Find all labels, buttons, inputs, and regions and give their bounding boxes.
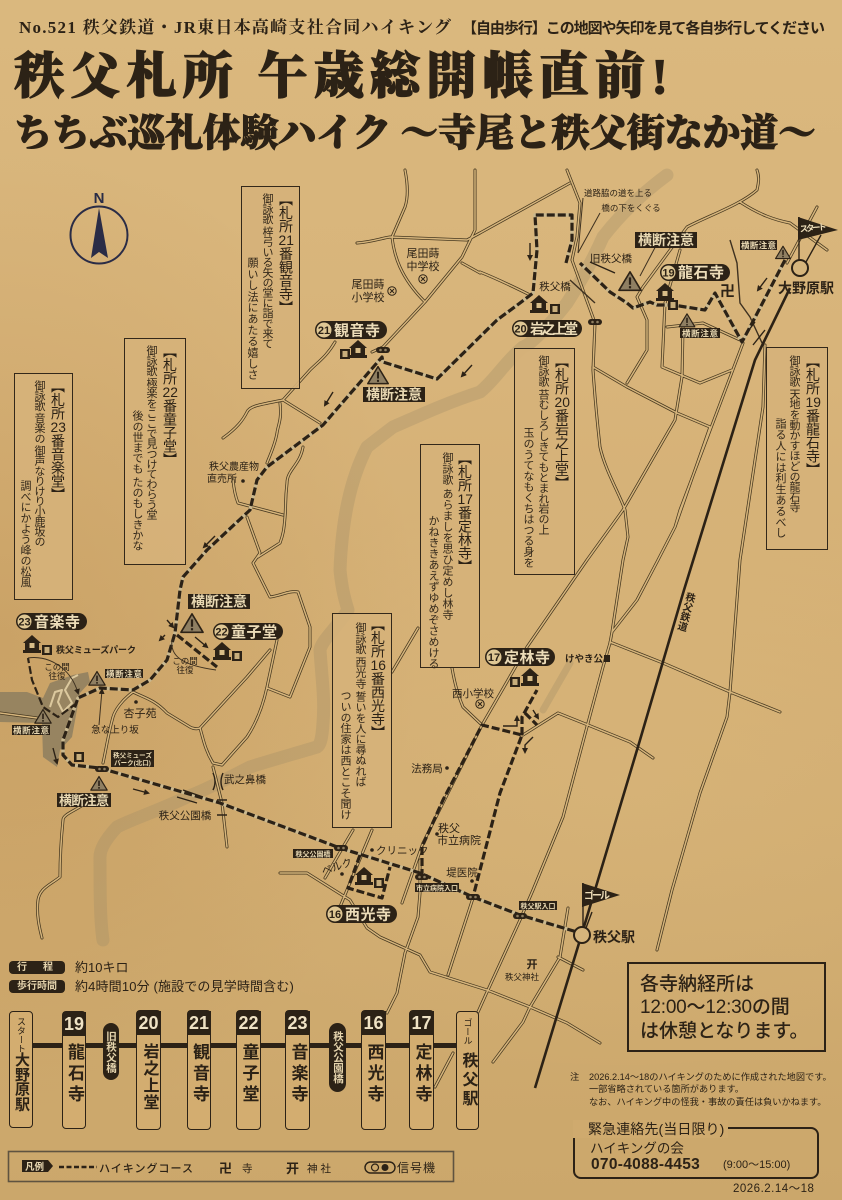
temple 21 marker — [315, 321, 387, 359]
roads — [0, 170, 827, 1087]
legend: hiking course: ハイキングコース — [99, 1161, 193, 1175]
number 22: 22 — [238, 1012, 259, 1032]
map place names: 尾田蒔 — [406, 247, 440, 260]
map place names: 堤医院 — [446, 867, 478, 879]
verse: temple 20 second line: 玉のうてなもくちはつる身を — [522, 427, 534, 567]
contact heading: 緊急連絡先(当日限り) — [588, 1121, 724, 1137]
heading: temple 22: 【札所 22 番童子堂】 — [162, 344, 178, 466]
map place names: 中学校 — [406, 259, 440, 273]
map place names: 武之鼻橋 — [224, 773, 266, 786]
warning triangles — [35, 246, 790, 790]
icon: temple symbol: 卍 — [720, 283, 735, 300]
bridge pill: 旧秩父橋 — [103, 1023, 119, 1080]
map place names: ベルク — [320, 857, 354, 878]
legend frame — [8, 1152, 454, 1182]
temple 19 marker — [656, 264, 730, 310]
map place names: 秩父公園橋 — [159, 809, 212, 822]
number 20: 20 — [138, 1012, 159, 1032]
legend: hiking course — [59, 1161, 193, 1175]
route stop: 23 — [285, 1010, 310, 1130]
verse: temple 22 first line: 御詠歌 極楽をここで見つけてわらう堂 — [145, 345, 157, 519]
temple 19 marker: 龍石寺 — [678, 264, 724, 282]
name 龍石寺: 龍石寺 — [65, 1043, 84, 1106]
start flag: スタート — [799, 222, 827, 234]
map place names: 秩父 — [438, 822, 460, 835]
note line 1: 2026.2.14〜18のハイキングのために作成された地図です。 — [589, 1072, 832, 1082]
dark map labels: 秩父公園橋 — [296, 850, 330, 858]
temple 22 marker: 童子堂 — [231, 624, 277, 641]
distance tag: 行程 — [17, 962, 69, 973]
extra fuda mark — [74, 752, 84, 762]
goal station — [574, 927, 635, 945]
temple 21 marker: 観音寺 — [334, 322, 380, 340]
verse panel: temple 20 — [514, 348, 575, 575]
number 17 — [410, 1010, 434, 1034]
verse: temple 19 first line: 御詠歌 天地を動かすほどの龍石寺 — [788, 355, 800, 512]
name 定林寺: 定林寺 — [412, 1043, 432, 1106]
map place names: 急な上り坂 — [91, 724, 139, 736]
temple 23 marker: 23 — [18, 616, 31, 628]
callout line 3: は休憩となります。 — [640, 1021, 809, 1042]
stamp route connector line — [30, 1043, 460, 1048]
dark map labels — [111, 750, 557, 910]
label: 秩父鉄道: 秩父鉄道 — [674, 589, 697, 633]
temple 16 marker — [326, 867, 397, 924]
map place names: 杏子苑 — [124, 707, 156, 720]
map place names: 道路脇の道を上る — [584, 188, 652, 198]
title line 1: 秩父札所 午歳総開帳直前! — [14, 48, 668, 104]
name 西光寺: 西光寺 — [364, 1043, 384, 1106]
goal flag — [582, 883, 620, 928]
goal station: 秩父駅 — [593, 929, 635, 945]
route stop: 19 — [62, 1011, 86, 1129]
dark map labels: 秩父駅入口 — [520, 902, 556, 910]
verse panel: temple 17 — [420, 444, 480, 668]
route stop: 17 — [409, 1010, 434, 1130]
verse: temple 16 second line: ついの住家は西とこそ聞け — [339, 690, 351, 820]
temple 19 marker: 19 — [662, 268, 675, 280]
title line 2: ちちぶ巡礼体験ハイク 〜寺尾と秩父街なか道〜 — [14, 113, 816, 155]
bridges — [177, 262, 765, 815]
legend: temple — [219, 1161, 252, 1176]
map place names: 秩父農産物 — [209, 460, 259, 473]
map place names: 直売所 — [207, 472, 237, 485]
legend: traffic signal — [365, 1161, 435, 1175]
note line 2: 一部省略されている箇所があります。 — [589, 1084, 744, 1094]
legend: shrine — [286, 1161, 332, 1176]
map place names: 橋の下をくぐる — [601, 203, 661, 213]
callout: rest time — [627, 962, 826, 1052]
route stop: 22 — [236, 1010, 261, 1130]
map place names: 往復 — [176, 665, 194, 675]
dark map labels: 市立病院入口 — [416, 884, 458, 892]
temple 17 marker: 定林寺 — [504, 648, 550, 666]
icon: north compass: N — [94, 190, 104, 207]
crossing caution labels: 横断注意 — [741, 240, 776, 250]
legend: temple: 寺 — [242, 1163, 252, 1175]
temple 17 marker: 17 — [488, 652, 500, 664]
route stop: start — [9, 1011, 33, 1128]
map place names: けやき公 — [565, 654, 603, 665]
crossing caution labels: 横断注意 — [191, 594, 247, 610]
map place names: 尾田蒔 — [352, 278, 384, 291]
crossing caution labels: 横断注意 — [638, 232, 694, 248]
map place names: 旧秩父橋 — [590, 252, 632, 265]
temple 16 marker: 16 — [329, 909, 341, 921]
legend: temple: 卍 — [219, 1161, 232, 1176]
name 観音寺: 観音寺 — [190, 1043, 209, 1106]
temple 16 marker: 西光寺 — [345, 906, 391, 924]
verse: temple 20 first line: 御詠歌 苔むしろしきてもとまれ岩の上 — [537, 355, 549, 534]
header subtitle: free walking note: 【自由歩行】この地図や矢印を見て各自歩行してください — [462, 19, 825, 37]
route stop: 20 — [136, 1010, 161, 1130]
legend: shrine: 开 — [286, 1161, 299, 1176]
note block — [570, 1072, 832, 1107]
map place names: クリニック — [376, 845, 428, 857]
number 23 — [286, 1010, 310, 1034]
crossing caution labels: 横断注意 — [682, 328, 718, 338]
temple 20 marker: 20 — [514, 324, 527, 336]
number 23: 23 — [287, 1012, 308, 1032]
legend: traffic signal: 信号機 — [397, 1161, 435, 1175]
heading: temple 21: 【札所 21 番観音寺】 — [278, 192, 294, 314]
map place names: 往復 — [48, 671, 66, 681]
number 17: 17 — [411, 1012, 432, 1032]
direction arrows — [53, 243, 767, 793]
map place names: 法務局 — [411, 762, 443, 775]
verse: temple 17 first line: 御詠歌 あらましを思ひ定めし林寺 — [441, 452, 453, 620]
number 16 — [362, 1010, 386, 1034]
map place names: 小学校 — [352, 290, 384, 304]
map place names — [44, 188, 661, 982]
legend: shrine: 神社 — [307, 1162, 332, 1175]
bridge pill: 秩父公園橋 — [329, 1023, 346, 1092]
icon: north compass — [70, 190, 128, 264]
crossing caution labels: 横断注意 — [106, 669, 142, 679]
map place names: この間 — [172, 656, 198, 666]
map place names: 秩父神社 — [505, 972, 539, 982]
verse panel: temple 16 — [332, 613, 392, 828]
verse panel: temple 19 — [766, 347, 828, 550]
contact box — [573, 1127, 819, 1179]
verse: temple 16 first line: 御詠歌 西光寺 誓いを人に尋ぬれば — [354, 622, 366, 786]
temple 17 marker — [485, 648, 555, 687]
route stop: 16 — [361, 1010, 386, 1130]
name 童子堂: 童子堂 — [240, 1043, 258, 1106]
rivers — [100, 175, 667, 940]
hiking route — [28, 215, 785, 932]
map place names: 开 — [526, 958, 538, 971]
start station — [778, 260, 834, 296]
temple 20 marker: 岩之上堂 — [530, 321, 578, 337]
contact organisation: ハイキングの会 — [590, 1141, 684, 1156]
name 音楽寺: 音楽寺 — [288, 1043, 308, 1106]
walking time text: 約4時間10分 (施設での見学時間含む) — [75, 979, 294, 994]
number 19: 19 — [64, 1014, 84, 1034]
traffic signals — [95, 319, 602, 919]
pond area — [0, 672, 90, 767]
header subtitle: course number: No.521 秩父鉄道・JR東日本高崎支社合同ハイキング — [19, 17, 451, 37]
verse panel: temple 23 — [14, 373, 73, 600]
verse: temple 23 first line: 御詠歌 音楽の 御声なりけり小鹿坂の — [33, 380, 45, 546]
start caption: スタート — [16, 1017, 26, 1053]
heading: temple 19: 【札所 19 番龍石寺】 — [805, 354, 821, 476]
verse: temple 17 second line: かねききあえずゆめぞさめける — [427, 515, 439, 669]
number 21: 21 — [189, 1012, 209, 1032]
note mark: 注 — [570, 1072, 579, 1082]
dark map labels: 秩父ミューズ — [113, 750, 152, 760]
map place names: 秩父橋 — [539, 280, 571, 293]
temple 22 marker: 22 — [215, 626, 228, 638]
start station name: 大野原駅 — [13, 1052, 30, 1111]
callout line 2: 12:00〜12:30の間 — [640, 997, 790, 1018]
goal flag: ゴール — [584, 889, 610, 902]
heading: temple 23: 【札所 23 番音楽堂】 — [50, 379, 66, 501]
railway line — [535, 288, 790, 1088]
start station: 大野原駅 — [778, 280, 834, 296]
temple 23 marker: 音楽寺 — [34, 614, 80, 631]
start flag — [798, 217, 838, 262]
name 岩之上堂: 岩之上堂 — [140, 1043, 158, 1111]
verse: temple 21 first line: 御詠歌 梓弓いる矢の堂に詣で来て — [261, 193, 273, 348]
heading: temple 20: 【札所 20 番岩之上堂】 — [554, 354, 570, 490]
heading: temple 17: 【札所 17 番定林寺】 — [457, 451, 473, 573]
temple 23 marker — [16, 613, 87, 655]
verse panel: temple 22 — [124, 338, 186, 565]
legend: hanrei tag — [22, 1160, 53, 1173]
verse: temple 22 second line: 後の世までも たのもしきかな — [131, 410, 143, 550]
verse: temple 19 second line: 詣る人には利生あるべし — [774, 418, 786, 538]
distance text: 約10キロ — [75, 960, 128, 975]
river thin lines — [570, 240, 763, 345]
verse panel: temple 21 — [241, 186, 300, 389]
map place names: 市立病院 — [437, 833, 481, 847]
walking time tag — [9, 980, 65, 993]
note line 3: なお、ハイキング中の怪我・事故の責任は負いかねます。 — [589, 1097, 826, 1107]
distance tag — [9, 961, 65, 974]
bridge pill: 旧秩父橋: 旧秩父橋 — [105, 1030, 117, 1072]
map place names: この間 — [44, 662, 70, 672]
heading: temple 16: 【札所 16 番西光寺】 — [370, 617, 386, 739]
legend: hanrei tag: 凡例 — [25, 1161, 44, 1173]
route stop: goal — [456, 1011, 479, 1130]
contact phone: 070-4088-4453 — [591, 1156, 700, 1173]
map place names: 西小学校 — [452, 687, 494, 700]
bridge pill: 秩父公園橋: 秩父公園橋 — [332, 1031, 344, 1084]
callout line 1: 各寺納経所は — [640, 974, 754, 995]
crossing caution labels: 横断注意 — [366, 386, 422, 402]
contact hours: (9:00〜15:00) — [723, 1159, 790, 1171]
map place names: 秩父ミューズパーク — [56, 644, 136, 655]
temple 21 marker: 21 — [318, 325, 330, 337]
issue date: 2026.2.14〜18 — [733, 1183, 814, 1195]
verse: temple 21 second line: 願いし法にあたる嬉しさ — [246, 257, 258, 380]
crossing caution labels: 横断注意 — [13, 726, 49, 736]
number 20 — [136, 1010, 160, 1034]
goal station name: 秩父駅 — [460, 1052, 476, 1109]
number 22 — [236, 1010, 260, 1034]
verse: temple 23 second line: 調べにかよう峰の松風 — [19, 480, 31, 587]
temple 22 marker — [213, 623, 283, 661]
walking time tag: 歩行時間 — [17, 981, 57, 992]
crossing caution labels: 横断注意 — [59, 793, 109, 808]
crossing caution labels — [12, 232, 777, 808]
route stop: 21 — [187, 1010, 211, 1130]
dark map labels: パーク(北口) — [114, 758, 151, 767]
goal caption: ゴール — [462, 1018, 472, 1045]
leader lines — [28, 198, 659, 725]
number 16: 16 — [363, 1012, 384, 1032]
temple 20 marker — [512, 295, 582, 337]
road: winding hill road — [50, 675, 78, 712]
